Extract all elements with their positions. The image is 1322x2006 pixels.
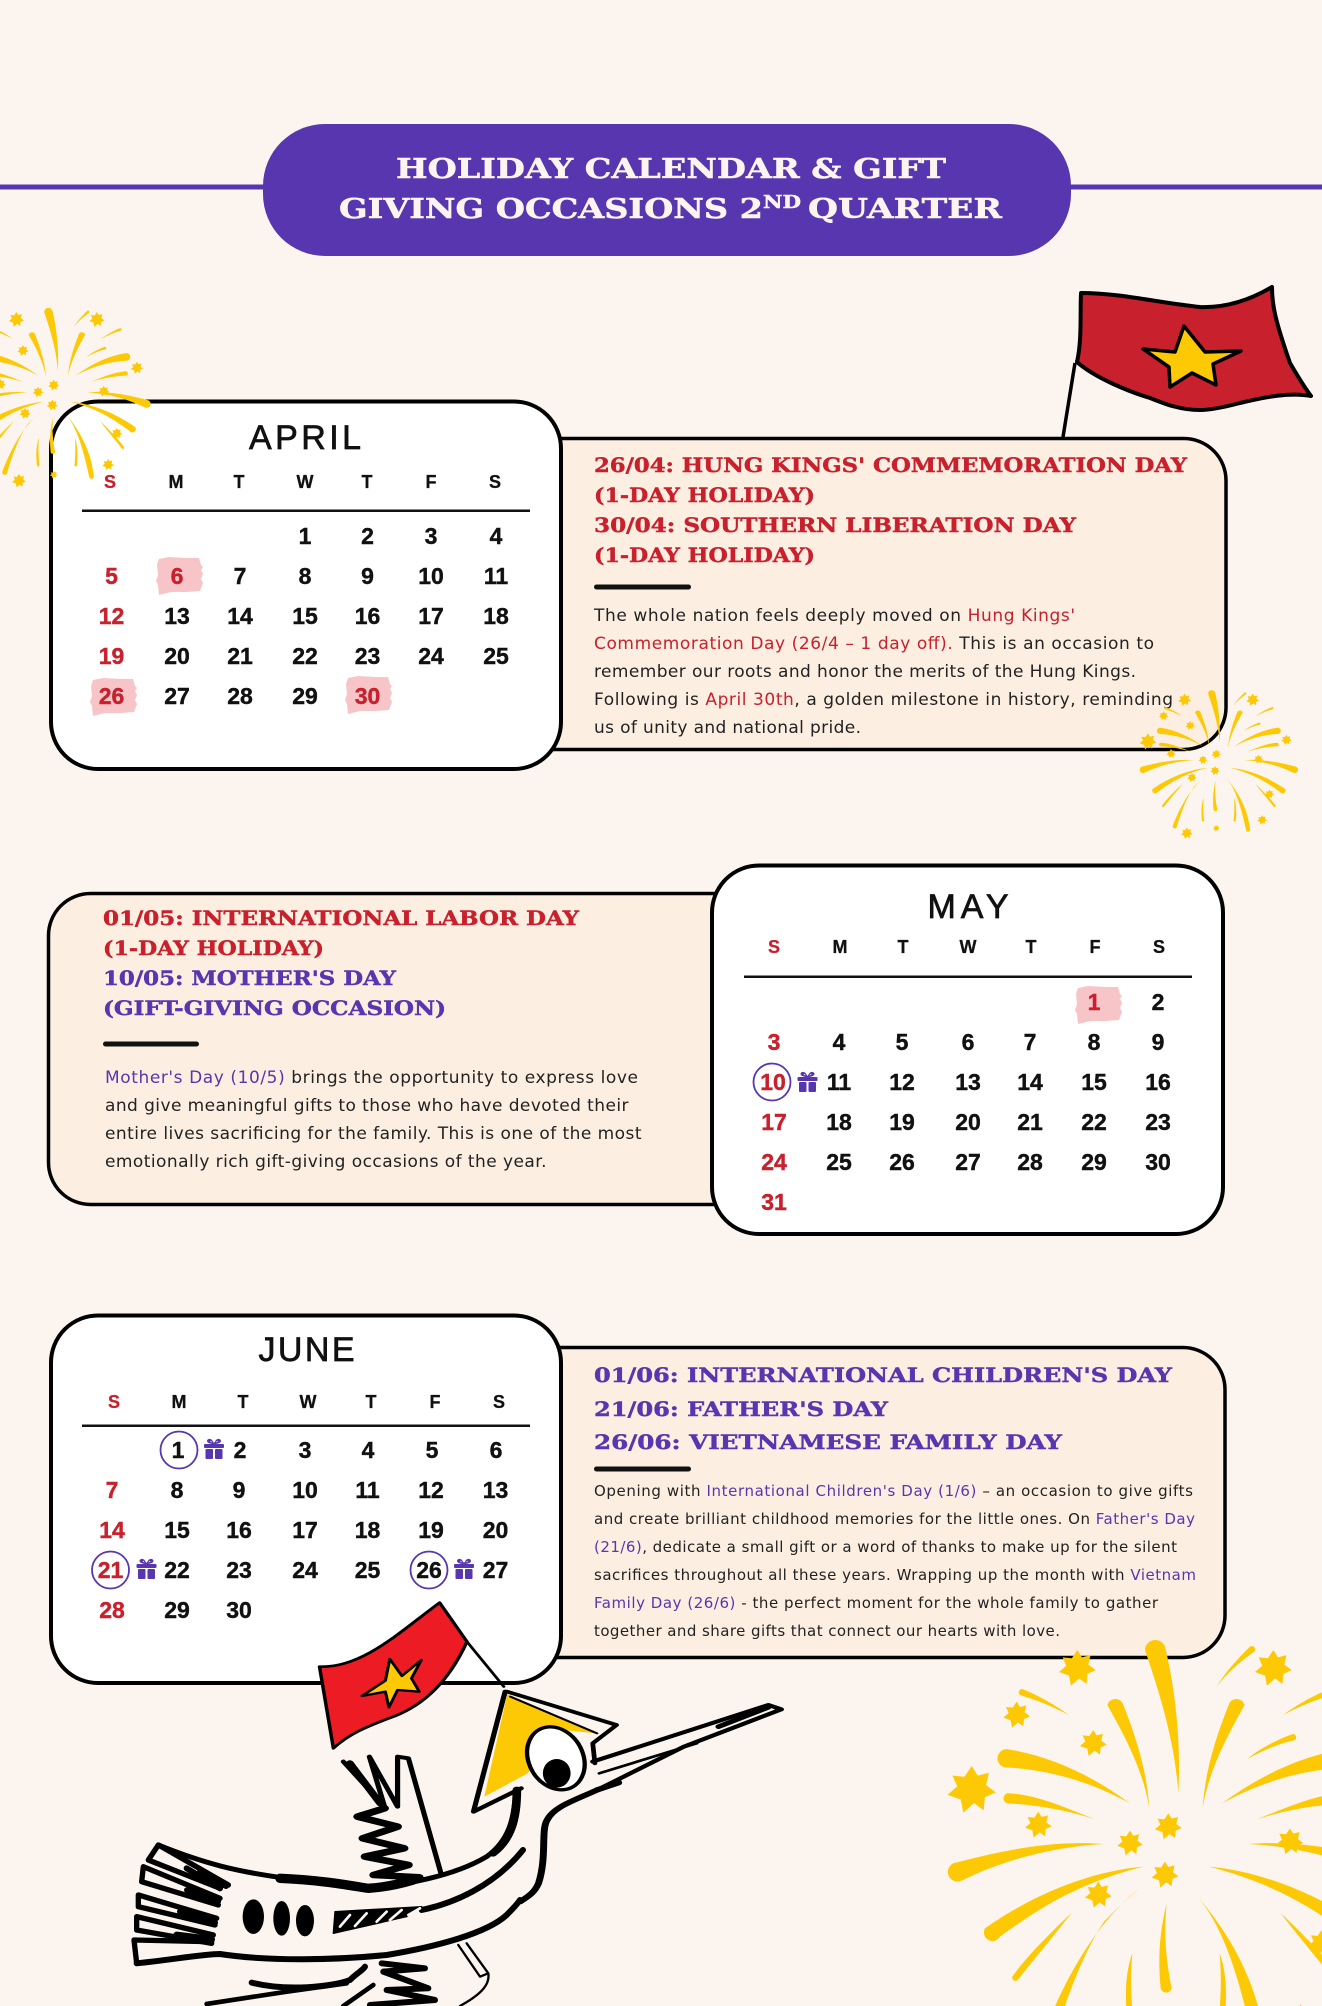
day grid: 8 xyxy=(1088,1029,1101,1055)
weekday header: M xyxy=(168,472,184,492)
icon: Vietnam flag on pole xyxy=(1063,287,1311,437)
day grid: 8 xyxy=(171,1477,184,1503)
weekday header: T xyxy=(1026,937,1036,957)
heading: May holidays xyxy=(103,906,580,1020)
day grid: 20 xyxy=(483,1517,508,1543)
panel: April holidays xyxy=(490,438,1226,750)
weekday header: T xyxy=(362,472,372,492)
day grid: 1 xyxy=(1088,989,1101,1015)
day grid: 27 xyxy=(164,683,190,709)
day grid: 11 xyxy=(827,1069,851,1095)
heading: April holidays xyxy=(594,453,1188,567)
day grid: 25 xyxy=(483,643,509,669)
day grid: 16 xyxy=(1145,1069,1171,1095)
weekday header: W xyxy=(300,1392,316,1412)
day grid: 14 xyxy=(99,1517,125,1543)
holiday highlights xyxy=(90,557,392,716)
weekday header xyxy=(744,937,1192,978)
text block: June description xyxy=(594,1482,1196,1640)
day grid: 21 xyxy=(227,643,253,669)
day grid: 25 xyxy=(826,1149,852,1175)
month title: June: JUNE xyxy=(258,1331,354,1369)
day grid: 23 xyxy=(226,1557,252,1583)
day grid: 10 xyxy=(418,563,444,589)
title banner: GIVING OCCASIONS 2 xyxy=(339,194,763,225)
day grid: 7 xyxy=(234,563,246,589)
day grid: 17 xyxy=(292,1517,318,1543)
day grid: 15 xyxy=(292,603,318,629)
text block: June description: and create brilliant childhood memories for the little ones. On Father's Day xyxy=(594,1510,1195,1528)
gift marker: 10 May xyxy=(754,1064,818,1100)
icon: firework top left xyxy=(0,308,151,487)
day grid: 7 xyxy=(106,1477,118,1503)
day grid: 6 xyxy=(171,563,183,589)
weekday header: T xyxy=(234,472,244,492)
text block: June description: sacrifices throughout all these years. Wrapping up the month with Vietnam xyxy=(594,1566,1196,1584)
heading: April holidays: (1-DAY HOLIDAY) xyxy=(594,483,815,507)
day grid: 18 xyxy=(355,1517,380,1543)
day grid: 24 xyxy=(761,1149,787,1175)
title banner: QUARTER xyxy=(808,194,1003,225)
day grid: 26 xyxy=(889,1149,915,1175)
day grid: 5 xyxy=(896,1029,909,1055)
text block: May description: and give meaningful gifts to those who have devoted their xyxy=(105,1096,628,1116)
weekday header: S xyxy=(1153,937,1165,957)
day grid: 10 xyxy=(292,1477,318,1503)
text block: April description xyxy=(593,606,1173,738)
day grid: 12 xyxy=(418,1477,444,1503)
text block: May description: Mother's Day (10/5) brings the opportunity to express love xyxy=(105,1068,638,1088)
text block: June description: Family Day (26/6) - the perfect moment for the whole family to gather xyxy=(594,1594,1159,1612)
heading: June holidays: 21/06: FATHER'S DAY xyxy=(594,1397,889,1421)
day grid: 19 xyxy=(418,1517,444,1543)
text block: May description: entire lives sacrificing for the family. This is one of the most xyxy=(105,1124,642,1144)
month title: May: MAY xyxy=(928,888,1008,926)
weekday header: S xyxy=(489,472,501,492)
day grid: 11 xyxy=(484,563,508,589)
icon: firework right of April panel xyxy=(1140,690,1298,839)
gift markers: 1, 21 and 26 June xyxy=(92,1432,474,1588)
weekday header: F xyxy=(430,1392,440,1412)
day grid: 14 xyxy=(227,603,253,629)
day grid: 30 xyxy=(355,683,380,709)
weekday header: W xyxy=(960,937,976,957)
day grid: 17 xyxy=(418,603,444,629)
day grid xyxy=(760,989,1171,1215)
day grid: 15 xyxy=(164,1517,190,1543)
weekday header: T xyxy=(898,937,908,957)
bird lower body, wing and tail xyxy=(134,1800,523,2006)
day grid: 2 xyxy=(234,1437,246,1463)
day grid: 18 xyxy=(483,603,509,629)
weekday header: F xyxy=(426,472,436,492)
weekday header: T xyxy=(366,1392,376,1412)
heading: May holidays: (1-DAY HOLIDAY) xyxy=(103,936,324,960)
weekday header: F xyxy=(1090,937,1100,957)
day grid: 28 xyxy=(99,1597,125,1623)
panel: June holidays xyxy=(490,1348,1225,1658)
title banner xyxy=(0,124,1322,256)
day grid: 29 xyxy=(164,1597,190,1623)
day grid: 20 xyxy=(164,643,190,669)
day grid: 3 xyxy=(425,523,437,549)
panel: April calendar xyxy=(51,402,561,769)
text block: May description xyxy=(105,1068,642,1172)
day grid: 21 xyxy=(1017,1109,1043,1135)
heading: June holidays: 26/06: VIETNAMESE FAMILY DAY xyxy=(594,1430,1063,1454)
day grid: 8 xyxy=(299,563,312,589)
day grid: 12 xyxy=(889,1069,915,1095)
text block: June description: (21/6), dedicate a small gift or a word of thanks to make up for the silent xyxy=(594,1538,1177,1556)
text block: April description: The whole nation feels deeply moved on Hung Kings' xyxy=(593,606,1075,626)
day grid: 14 xyxy=(1017,1069,1043,1095)
day grid: 26 xyxy=(416,1557,442,1583)
text block: April description: us of unity and national pride. xyxy=(594,718,861,738)
heading: May holidays: 01/05: INTERNATIONAL LABOR DAY xyxy=(103,906,580,930)
day grid: 23 xyxy=(355,643,380,669)
day grid: 3 xyxy=(768,1029,780,1055)
day grid: 5 xyxy=(105,563,118,589)
weekday header: M xyxy=(832,937,848,957)
day grid: 10 xyxy=(760,1069,786,1095)
weekday header: S xyxy=(108,1392,120,1412)
day grid: 12 xyxy=(99,603,124,629)
day grid: 6 xyxy=(962,1029,974,1055)
heading: April holidays: (1-DAY HOLIDAY) xyxy=(594,543,815,567)
day grid: 5 xyxy=(426,1437,439,1463)
heading: June holidays xyxy=(594,1363,1173,1454)
weekday header xyxy=(82,472,530,512)
panel: May calendar xyxy=(712,866,1223,1234)
day grid: 15 xyxy=(1081,1069,1107,1095)
heading: April holidays: 26/04: HUNG KINGS' COMMEMORATION DAY xyxy=(594,453,1188,477)
day grid: 16 xyxy=(355,603,380,629)
panel: May holidays xyxy=(48,894,780,1204)
day grid: 9 xyxy=(361,563,374,589)
weekday header: T xyxy=(238,1392,248,1412)
weekday header: S xyxy=(493,1392,505,1412)
day grid: 4 xyxy=(833,1029,846,1055)
title banner: HOLIDAY CALENDAR & GIFT xyxy=(396,154,946,185)
weekday header: S xyxy=(768,937,780,957)
day grid: 26 xyxy=(99,683,124,709)
text block: May description: emotionally rich gift-giving occasions of the year. xyxy=(105,1152,546,1172)
day grid: 27 xyxy=(955,1149,981,1175)
heading: June holidays: 01/06: INTERNATIONAL CHILDREN'S DAY xyxy=(594,1363,1173,1387)
day grid: 29 xyxy=(292,683,318,709)
day grid: 28 xyxy=(1017,1149,1043,1175)
illustration: Lac bird with flag and conical hat xyxy=(134,1603,781,2006)
day grid: 24 xyxy=(418,643,444,669)
day grid xyxy=(98,1437,508,1623)
day grid: 18 xyxy=(826,1109,852,1135)
day grid: 25 xyxy=(355,1557,380,1583)
day grid: 20 xyxy=(955,1109,981,1135)
day grid: 1 xyxy=(172,1437,185,1463)
day grid: 30 xyxy=(1145,1149,1171,1175)
heading: April holidays: 30/04: SOUTHERN LIBERATION DAY xyxy=(594,513,1077,537)
weekday header: M xyxy=(172,1392,186,1412)
day grid: 19 xyxy=(889,1109,915,1135)
day grid: 22 xyxy=(164,1557,190,1583)
panel: June calendar xyxy=(51,1316,561,1683)
day grid: 1 xyxy=(299,523,312,549)
day grid: 19 xyxy=(99,643,124,669)
day grid: 6 xyxy=(490,1437,502,1463)
holiday highlight xyxy=(1075,986,1122,1024)
day grid: 9 xyxy=(1152,1029,1164,1055)
day grid: 23 xyxy=(1145,1109,1171,1135)
day grid: 28 xyxy=(227,683,253,709)
day grid: 9 xyxy=(233,1477,245,1503)
day grid: 16 xyxy=(226,1517,252,1543)
day grid: 17 xyxy=(761,1109,787,1135)
text block: June description: Opening with International Children's Day (1/6) – an occasion to give gifts xyxy=(594,1482,1193,1500)
day grid xyxy=(99,523,509,709)
bird upper body, flag and hat xyxy=(320,1603,781,1902)
weekday header: S xyxy=(104,472,116,492)
day grid: 30 xyxy=(226,1597,252,1623)
day grid: 2 xyxy=(361,523,374,549)
weekday header: W xyxy=(296,472,314,492)
day grid: 13 xyxy=(955,1069,981,1095)
day grid: 2 xyxy=(1152,989,1164,1015)
heading: May holidays: (GIFT-GIVING OCCASION) xyxy=(103,996,446,1020)
title banner: ND xyxy=(763,192,801,213)
day grid: 13 xyxy=(483,1477,508,1503)
day grid: 13 xyxy=(164,603,190,629)
month title: April: APRIL xyxy=(249,419,361,457)
day grid: 29 xyxy=(1081,1149,1107,1175)
day grid: 31 xyxy=(761,1189,787,1215)
text block: April description: Following is April 30th, a golden milestone in history, reminding xyxy=(594,690,1173,710)
day grid: 24 xyxy=(292,1557,318,1583)
day grid: 4 xyxy=(362,1437,375,1463)
heading: May holidays: 10/05: MOTHER'S DAY xyxy=(103,966,397,990)
day grid: 21 xyxy=(98,1557,123,1583)
day grid: 22 xyxy=(292,643,318,669)
icon: large firework bottom right xyxy=(948,1640,1322,2006)
day grid: 11 xyxy=(355,1477,380,1503)
text block: June description: together and share gifts that connect our hearts with love. xyxy=(594,1622,1060,1640)
day grid: 22 xyxy=(1081,1109,1107,1135)
day grid: 7 xyxy=(1024,1029,1036,1055)
weekday header xyxy=(82,1392,530,1427)
text block: April description: Commemoration Day (26/4 – 1 day off). This is an occasion to xyxy=(594,634,1154,654)
day grid: 4 xyxy=(490,523,503,549)
day grid: 3 xyxy=(299,1437,311,1463)
day grid: 27 xyxy=(483,1557,508,1583)
text block: April description: remember our roots and honor the merits of the Hung Kings. xyxy=(594,662,1136,682)
